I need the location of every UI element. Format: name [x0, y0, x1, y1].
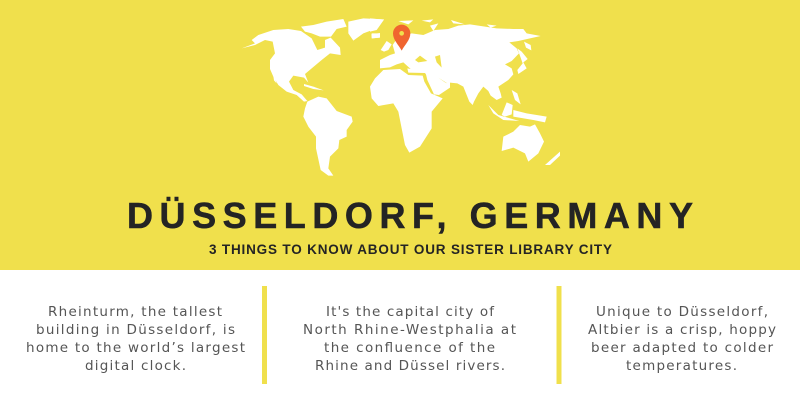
- fact: capital city: It's the capital city of: [326, 304, 495, 320]
- fact: Altbier: temperatures.: [626, 358, 737, 374]
- fact: Rheinturm: [26, 304, 245, 374]
- fact: capital city: Rhine and Düssel rivers.: [315, 358, 505, 374]
- fact: capital city: North Rhine-Westphalia at: [303, 322, 516, 338]
- icon: location pin on Düsseldorf: [393, 25, 410, 51]
- divider: left: [262, 286, 267, 384]
- fact: Altbier: [588, 304, 776, 374]
- title: DÜSSELDORF, GERMANY: [127, 195, 693, 236]
- fact: Altbier: Unique to Düsseldorf,: [596, 304, 768, 320]
- fact: Rheinturm: digital clock.: [85, 358, 186, 374]
- fact: Rheinturm: Rheinturm, the tallest: [48, 304, 222, 320]
- fact: Rheinturm: home to the world’s largest: [26, 340, 245, 356]
- world map: [242, 18, 560, 176]
- fact: capital city: [303, 304, 516, 374]
- subtitle: 3 THINGS TO KNOW ABOUT OUR SISTER LIBRARY CITY: [209, 242, 612, 257]
- map: americas: [242, 18, 384, 176]
- fact: Rheinturm: building in Düsseldorf, is: [36, 322, 235, 338]
- map: europe, asia, africa, australia: [370, 18, 560, 165]
- fact: Altbier: Altbier is a crisp, hoppy: [588, 322, 776, 338]
- yellow header panel: [0, 0, 800, 270]
- fact: Altbier: beer adapted to colder: [591, 340, 773, 356]
- divider: right: [556, 286, 562, 384]
- map: inland seas: [415, 55, 447, 83]
- fact: capital city: the confluence of the: [324, 340, 495, 356]
